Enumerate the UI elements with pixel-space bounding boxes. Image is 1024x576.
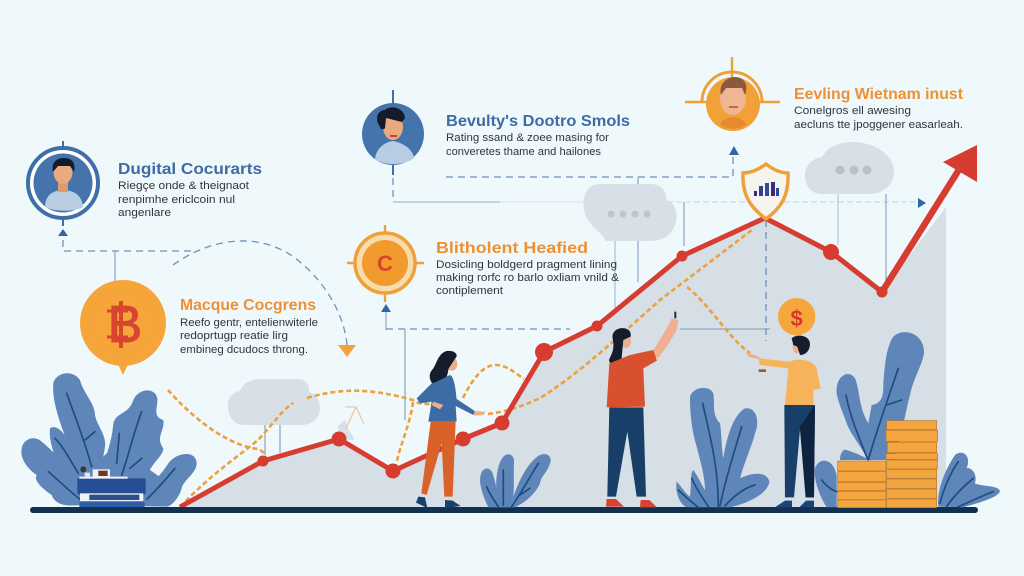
text: Eevling block (794, 86, 964, 131)
icon: avatar digital (28, 141, 98, 226)
plant: center small (480, 454, 551, 507)
cloud: lower (228, 379, 320, 425)
man with yellow shirt (746, 298, 821, 507)
icon: bitcoin coin (80, 280, 166, 375)
text: Digital block (118, 161, 262, 219)
text: Eevling block: Conelgros ell awesing (794, 105, 911, 117)
plant: far right small (938, 453, 1000, 507)
text: Digital block: angenlare (118, 207, 171, 219)
small tent sketch (338, 407, 364, 440)
text: Blitholent block: Dosicling boldgerd pragment lining (436, 259, 617, 271)
growth line and arrow (180, 145, 977, 507)
text: Macque block: Macque Cocgrens (180, 297, 316, 314)
text: Digital block: Dugital Cocurarts (118, 161, 262, 178)
text: Blitholent block (436, 240, 620, 297)
text: Eevling block: aecluns tte jpoggener easarleah. (794, 119, 963, 131)
icon: bitcoin coin: B (108, 296, 142, 354)
gray area under the growth line (186, 207, 946, 507)
text: Digital block: renpimhe ericlcoin nul (118, 194, 235, 206)
icon: orange target avatar (685, 57, 780, 131)
text: Bevulty block (446, 113, 630, 158)
text: Bevulty block: Bevulty's Dootro Smols (446, 113, 630, 130)
icon: shield with bars (743, 164, 788, 219)
speech bubble: left (583, 184, 677, 241)
speech bubble: right (805, 142, 894, 194)
coin stacks (838, 421, 938, 508)
connector lines (58, 146, 926, 455)
man with yellow shirt: $ (791, 306, 803, 331)
text: Eevling block: Eevling Wietnam inust (794, 86, 964, 103)
text: Macque block (180, 297, 318, 356)
text: Macque block: Reefo gentr, entelienwiterle (180, 317, 318, 329)
stand: navy printer box (77, 466, 146, 507)
icon: orange target coin: C (377, 251, 393, 276)
text: Blitholent block: Blitholent Heafied (436, 240, 588, 257)
text: Bevulty block: converetes thame and hailones (446, 146, 601, 158)
baseline (30, 507, 978, 513)
plant: large left (21, 373, 197, 507)
text: Digital block: Riegçe onde & theignaot (118, 180, 249, 192)
orange dashed curves (168, 230, 752, 507)
woman with blue top (416, 351, 485, 508)
plant: lower right trio (676, 332, 924, 507)
text: Macque block: embineg dcudocs throng. (180, 344, 308, 356)
text: Macque block: redoprtugp reatie lirg (180, 330, 288, 342)
icon: avatar curly hair (362, 90, 424, 175)
text: Blitholent block: making rorfc ro barlo oxliam vnild & (436, 272, 620, 284)
icon: orange target coin (347, 225, 424, 302)
text: Bevulty block: Rating ssand & zoee masing for (446, 132, 609, 144)
text: Blitholent block: contiplement (436, 285, 503, 297)
woman with red top (606, 312, 678, 507)
